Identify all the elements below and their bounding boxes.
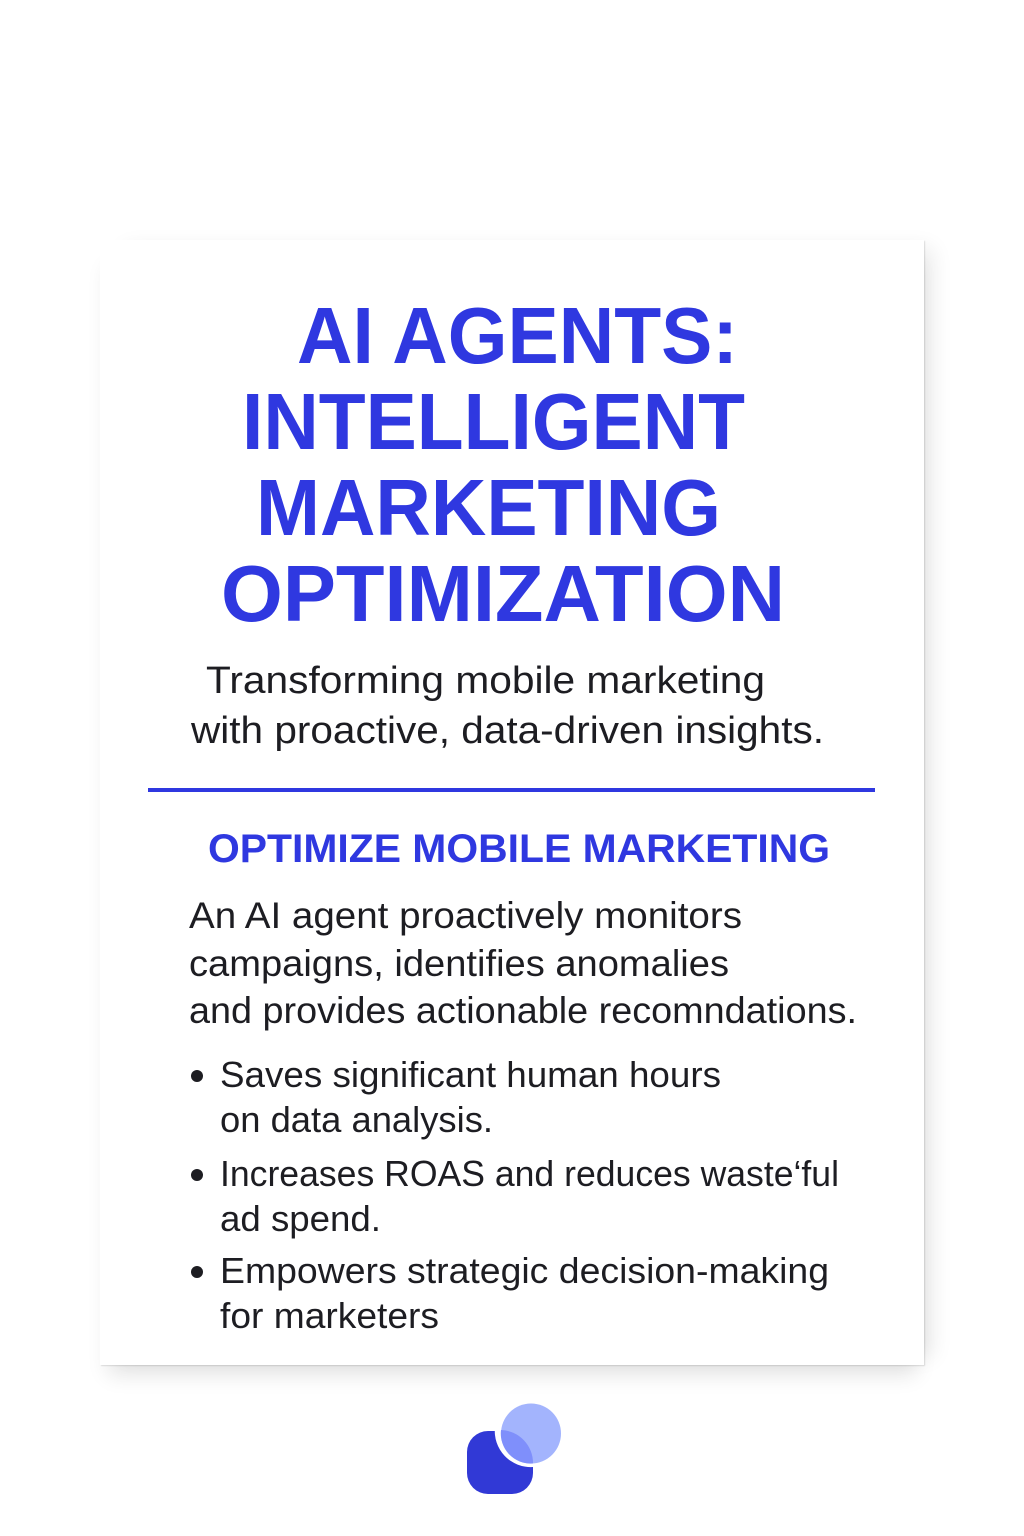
description paragraph [189, 895, 857, 1031]
title: OPTIMIZATION [221, 549, 785, 638]
bullet: empowers decisions: Empowers strategic decision-making [220, 1250, 829, 1291]
title: INTELLIGENT [242, 377, 745, 466]
title: MARKETING [256, 463, 721, 552]
section heading: OPTIMIZE MOBILE MARKETING [208, 827, 830, 871]
subtitle: Transforming mobile marketing [206, 660, 765, 702]
bullet: increases ROAS [191, 1153, 839, 1239]
subtitle: with proactive, data-driven insights. [190, 710, 824, 752]
bullet: empowers decisions [191, 1250, 829, 1336]
bullet: saves hours: Saves significant human hours [220, 1054, 721, 1095]
description paragraph: campaigns, identifies anomalies [189, 943, 729, 984]
description paragraph: An AI agent proactively monitors [189, 895, 742, 936]
bullet: empowers decisions: for marketers [220, 1295, 439, 1336]
title: AI AGENTS: [297, 291, 738, 380]
description paragraph: and provides actionable recomndations. [189, 990, 857, 1031]
subtitle [190, 660, 824, 752]
bullet: saves hours: on data analysis. [220, 1099, 493, 1140]
bullet: saves hours [191, 1054, 721, 1140]
icon: logo with square and overlapping circle [467, 1404, 561, 1494]
panel: white card [100, 240, 924, 1365]
bullet: increases ROAS: Increases ROAS and reduces waste‘ful [220, 1153, 839, 1194]
bullet: increases ROAS: ad spend. [220, 1198, 381, 1239]
title [221, 291, 785, 638]
